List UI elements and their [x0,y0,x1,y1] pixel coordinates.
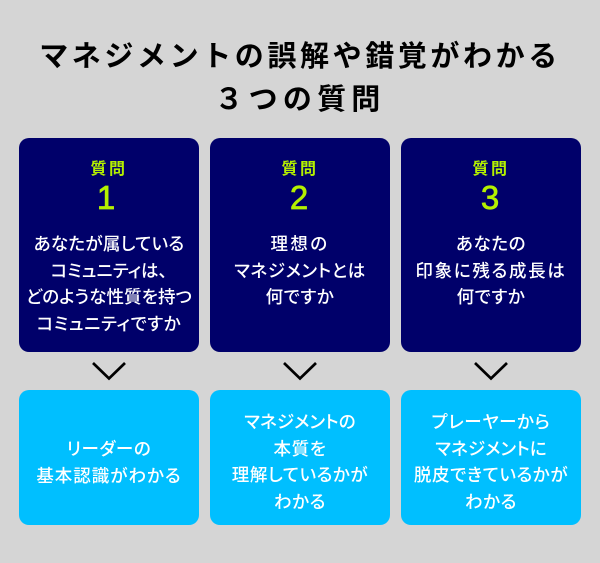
title: ３つの質問 [214,84,386,116]
text: answer 2: 理解しているかが [232,465,368,485]
panel: question 3 [401,138,581,352]
text: question 3 body: 何ですか [457,287,525,307]
panel: question 2 [210,138,390,352]
text: question 1 body: コミュニティですか [37,314,181,334]
text: question 1 body [26,234,192,334]
panel: answer 1 [19,390,199,525]
arrow: question 1 to answer 1 [92,362,126,380]
text: question 1 body: どのような性質を持つ [26,287,192,307]
label: question 1: 質問 [90,161,128,178]
arrow: question 2 to answer 2 [283,362,317,380]
text: answer 3: プレーヤーから [432,412,550,432]
text: answer 2: わかる [274,492,326,512]
text: answer 1 [36,439,182,486]
text: answer 1: リーダーの [67,439,151,459]
text: question 2 body: 理想の [270,234,330,254]
title [39,40,561,116]
number: 1: 1 [97,179,115,216]
text: answer 2 [232,412,368,512]
text: answer 3: 脱皮できているかが [414,465,568,485]
text: answer 1: 基本認識がわかる [36,466,182,486]
text: question 2 body: 何ですか [266,287,334,307]
panel: question 1 [19,138,199,352]
text: answer 2: 本質を [274,438,326,458]
text: answer 3 [414,412,568,512]
text: answer 3: マネジメントに [435,438,547,458]
label: question 2: 質問 [281,161,318,178]
text: question 2 body: マネジメントとは [234,260,366,280]
label: question 3: 質問 [472,161,510,178]
text: question 2 body [234,234,366,307]
text: answer 3: わかる [465,492,517,512]
number: 2: 2 [290,179,308,216]
text: question 1 body: コミュニティは、 [51,260,167,280]
panel: answer 3 [401,390,581,525]
text: question 1 body: あなたが属している [34,234,184,254]
number: 3: 3 [481,179,499,216]
panel: answer 2 [210,390,390,525]
arrow: question 3 to answer 3 [474,362,508,380]
text: question 3 body [415,234,567,307]
text: question 3 body: あなたの [456,234,526,254]
title: マネジメントの誤解や錯覚がわかる [39,41,561,73]
text: answer 2: マネジメントの [244,412,356,432]
text: question 3 body: 印象に残る成長は [415,260,567,280]
